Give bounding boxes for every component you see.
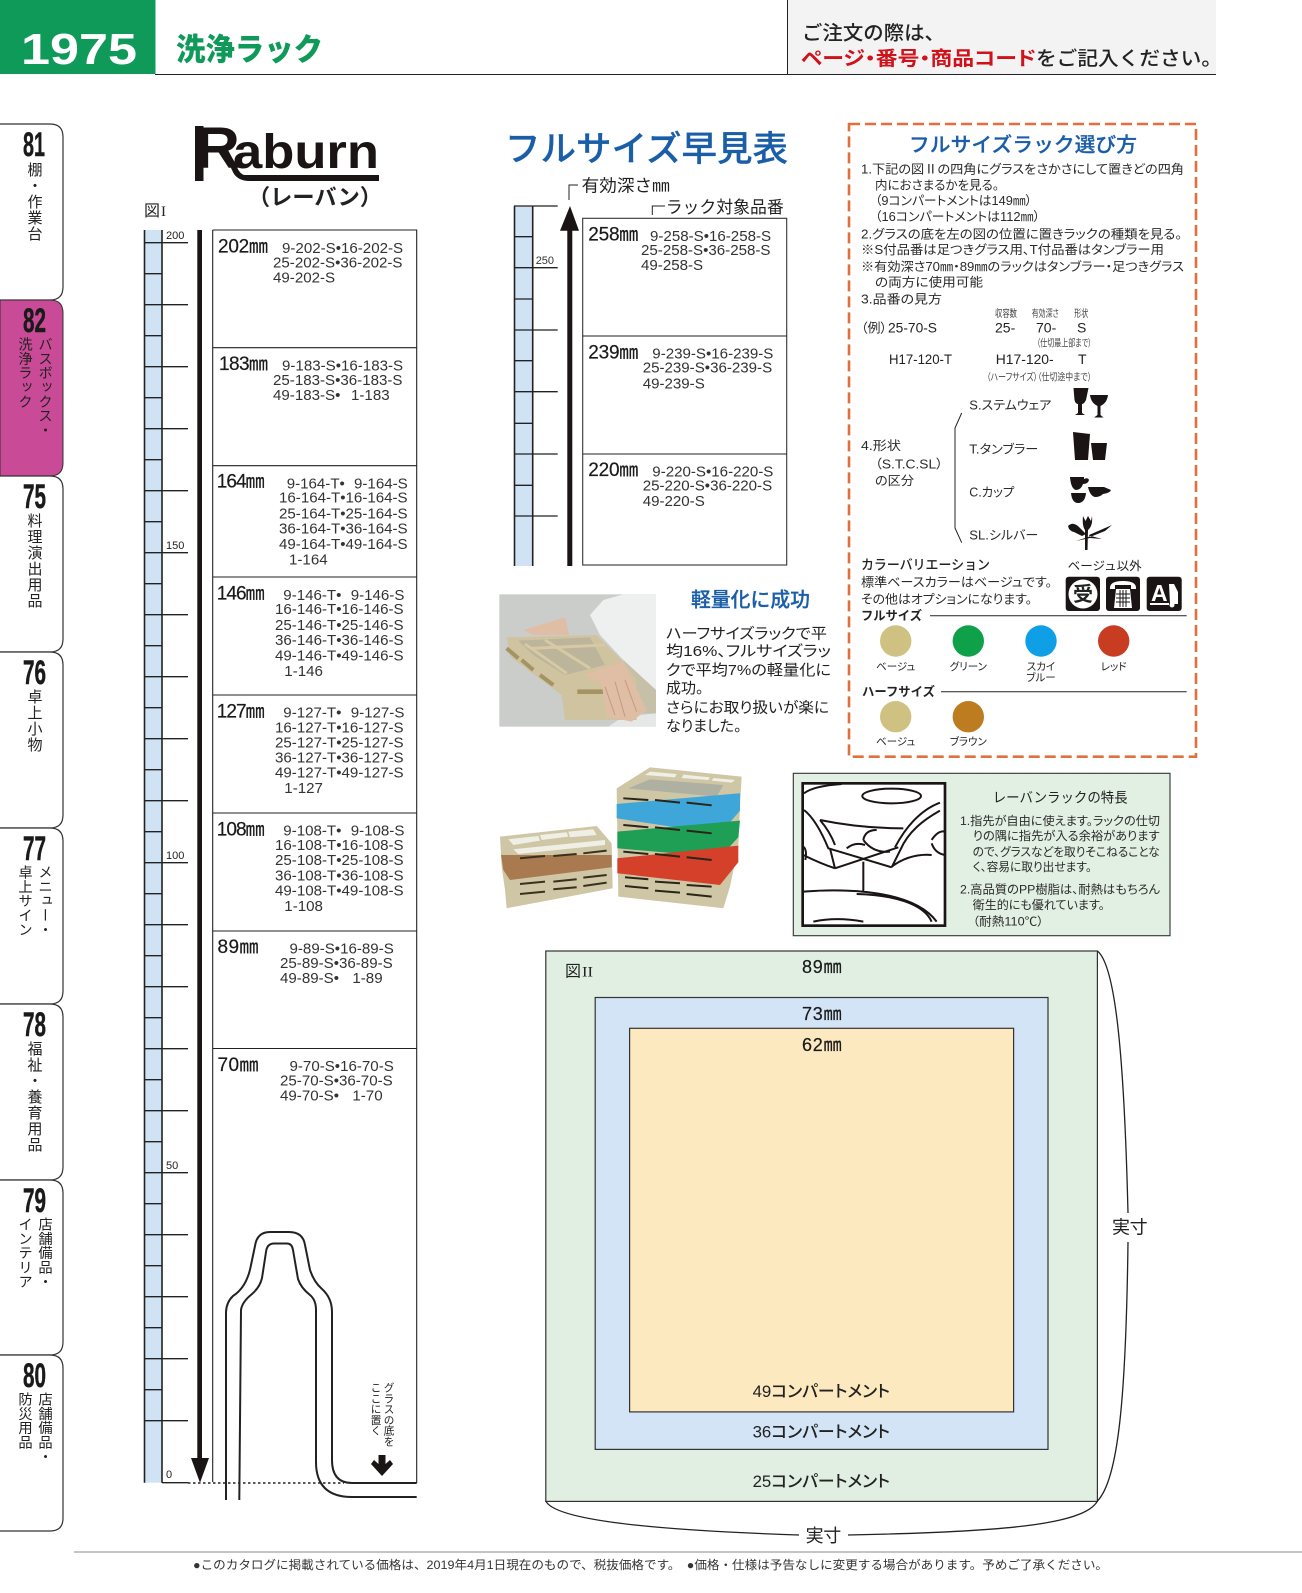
row 89: 9-89-S•16-89-S — [290, 941, 394, 958]
row 202: 49-202-S — [273, 270, 335, 286]
row 70: 70㎜ — [218, 1055, 258, 1076]
color variation — [861, 557, 1187, 748]
row 70: 1-70 — [352, 1088, 383, 1104]
row 258 — [588, 225, 771, 274]
swatch: green — [949, 625, 987, 673]
base dotted line — [188, 1482, 344, 1484]
part number key: 収容数 — [995, 307, 1017, 320]
part number key — [861, 307, 1092, 384]
row 89: 49-89-S• — [280, 970, 339, 987]
text: weight reduction: ハーフサイズラックで平 — [666, 625, 827, 642]
instructions: 1.下記の図Ⅱの四角にグラスをさかさにして置きどの四角 — [861, 162, 1184, 176]
figure 1 ruler: 0 — [166, 1469, 172, 1481]
side index tabs — [0, 124, 63, 1531]
row 164: 9-164-S — [354, 475, 408, 492]
half size colors — [862, 684, 1187, 748]
bracket: right — [1097, 951, 1148, 1501]
figure 2: actual size squares — [546, 951, 1148, 1546]
feature text: （耐熱110℃） — [973, 915, 1044, 929]
row 183: 25-183-S•36-183-S — [273, 372, 402, 389]
icon: cutlery — [1068, 516, 1112, 550]
row 108: 36-108-T•36-108-S — [275, 868, 404, 884]
header — [0, 0, 1222, 74]
row 202: 9-202-S•16-202-S — [282, 240, 403, 257]
row 108: 25-108-T•25-108-S — [275, 852, 404, 869]
row 70: 9-70-S•16-70-S — [290, 1058, 394, 1075]
row 146: 36-146-T•36-146-S — [275, 632, 404, 649]
depth header label: 有効深さ㎜ — [582, 177, 670, 196]
figure 1 ruler continuation — [514, 206, 558, 566]
part number key: （例） — [861, 321, 887, 336]
square: 49 compartments — [630, 1028, 1014, 1412]
figure 1 ruler continuation: 250 — [536, 255, 554, 267]
swatch: brown — [950, 701, 987, 748]
tab 77 — [0, 828, 63, 1004]
panel: how to choose — [849, 124, 1196, 757]
tab 75: 75 — [23, 478, 46, 516]
feature title: レーバンラックの特長 — [993, 790, 1128, 806]
row 146: 9-146-T• — [283, 587, 341, 604]
part number key: 70- — [1036, 320, 1057, 336]
part number key: 有効深さ — [1032, 307, 1059, 320]
swatch: brown: ブラウン — [950, 735, 987, 748]
row 108: 49-108-T•49-108-S — [275, 882, 404, 900]
color variation: カラーバリエーション — [861, 557, 990, 572]
square: 25 compartments: 図 — [565, 964, 581, 981]
feature text — [960, 814, 1161, 929]
tab 76 — [0, 652, 63, 828]
text: weight reduction: さらにお取り扱いが楽に — [666, 700, 829, 717]
panel: Raburn rack features — [793, 773, 1170, 936]
tab 76: 卓上小物 — [26, 689, 42, 753]
row 108: 9-108-S — [351, 822, 404, 840]
shape classification — [861, 388, 1112, 550]
feature text: りの隅に指先が入る余裕があります — [973, 829, 1160, 843]
instructions: 2.グラスの底を左の図の位置に置きラックの種類を見る。 — [861, 226, 1182, 241]
shape classification: S.ステムウェア — [969, 398, 1051, 412]
tab 75 — [0, 476, 63, 652]
row 220 — [588, 460, 773, 510]
color variation: その他はオプションになります。 — [861, 592, 1032, 606]
icon: stemware — [1074, 388, 1108, 418]
row 89: 89㎜ — [218, 937, 258, 958]
icon: delivery: A — [1151, 580, 1168, 606]
row 164: 1-164 — [289, 551, 328, 568]
row 239: 49-239-S — [643, 375, 705, 392]
stacked full size racks — [617, 767, 742, 908]
part number key: H17-120- — [996, 351, 1054, 367]
swatch: beige: ベージュ — [876, 736, 915, 748]
bracket: bottom — [546, 1501, 1097, 1546]
shape classification: 4.形状 — [861, 439, 901, 453]
tab 77: メニュー・ — [36, 865, 52, 936]
shape classification: C.カップ — [969, 486, 1015, 500]
bracket: bottom: 実寸 — [806, 1526, 841, 1546]
arrow: depth upward — [560, 206, 579, 566]
shape classification: （S.T.C.SL） — [875, 457, 943, 471]
row 108: 1-108 — [284, 898, 323, 915]
row 70 — [218, 1055, 394, 1104]
order note: ご注文の際は、 — [802, 22, 945, 44]
row 164: 25-164-T•25-164-S — [279, 505, 408, 522]
instructions: ※S付品番は足つきグラス用、T付品番はタンブラー用 — [861, 242, 1164, 257]
tab 82 active: バスボックス・ — [36, 337, 52, 437]
row 89: 25-89-S•36-89-S — [280, 955, 393, 972]
swatch: beige — [876, 625, 915, 673]
tab 80: 店舗備品・ — [36, 1392, 52, 1464]
row 220: 49-220-S — [643, 493, 705, 510]
illustration: finger space — [803, 783, 945, 926]
feature text: 1.指先が自由に使えます。ラックの仕切 — [960, 814, 1160, 828]
row 183: 183㎜ — [219, 354, 268, 375]
feature text: く、容易に取り出せます。 — [973, 860, 1092, 874]
text: weight reduction: なりました。 — [666, 718, 742, 735]
row 146: 1-146 — [284, 663, 323, 680]
brand logo: （レーバン） — [248, 185, 382, 210]
row 183: 1-183 — [351, 387, 390, 404]
square: 49 compartments: 62㎜ — [802, 1035, 842, 1055]
figure 1 ruler — [144, 230, 188, 1483]
feature text: ので、グラスなどを取りそこねることな — [973, 845, 1160, 859]
tab 78: 78 — [23, 1006, 46, 1044]
row 70: 49-70-S• — [280, 1088, 339, 1104]
row 183 — [219, 354, 403, 404]
row 202: 202㎜ — [218, 237, 268, 258]
row 202 — [218, 237, 403, 286]
row 108 — [217, 820, 404, 915]
swatch: sky blue: スカイ — [1027, 661, 1056, 673]
instructions: ※有効深さ70㎜・89㎜のラックはタンブラー・足つきグラス — [861, 259, 1184, 274]
part number key: H17-120-T — [889, 351, 952, 367]
rack code header label: ラック対象品番 — [666, 198, 784, 217]
photo: hands holding rack — [499, 594, 656, 727]
part number key: S — [1077, 320, 1086, 336]
part number key: 形状 — [1074, 307, 1088, 320]
row 127 — [217, 702, 404, 797]
order note — [801, 22, 1222, 70]
row 183: 49-183-S• — [273, 387, 340, 404]
text: weight reduction: 成功。 — [666, 680, 704, 697]
tab 80: 80 — [23, 1357, 46, 1395]
row 127: 36-127-T•36-127-S — [275, 750, 404, 766]
panel title: フルサイズラック選び方 — [909, 134, 1137, 157]
footer: ●このカタログに掲載されている価格は、2019年4月1日現在のもので、税抜価格です。 ●価格・仕様は予告なしに変更する場合があります。予めご了承ください。 — [193, 1557, 1108, 1572]
page number block — [0, 0, 156, 74]
row 127: 1-127 — [284, 780, 323, 797]
tab 80: 防災用品 — [16, 1392, 32, 1449]
row 146: 16-146-T•16-146-S — [275, 601, 404, 618]
instructions: （9コンパートメントは149㎜） — [875, 194, 1032, 208]
half size rack — [500, 826, 613, 908]
row 258: 9-258-S•16-258-S — [650, 228, 771, 245]
row 146: 25-146-T•25-146-S — [275, 617, 404, 634]
tab 77: 卓上サイン — [16, 865, 32, 936]
brand logo: R — [195, 116, 240, 181]
tab 75: 料理演出用品 — [26, 513, 42, 609]
row 108: 9-108-T• — [283, 822, 341, 840]
row 108: 16-108-T•16-108-S — [275, 837, 404, 854]
row 89 — [218, 937, 394, 987]
shape classification: SL.シルバー — [969, 528, 1038, 542]
shape classification: の区分 — [875, 474, 914, 488]
feature text: 衛生的にも優れています。 — [973, 898, 1105, 912]
order note: をご記入ください。 — [1036, 48, 1222, 70]
row 164 — [217, 471, 408, 568]
tab 79: 79 — [23, 1182, 46, 1220]
half size colors: ハーフサイズ — [862, 684, 935, 699]
row 164: 164㎜ — [217, 471, 265, 492]
shape classification: T.タンブラー — [969, 441, 1038, 456]
row 146: 146㎜ — [217, 583, 265, 604]
instructions: （16コンパートメントは112㎜） — [875, 210, 1040, 224]
color variation: ベージュ以外 — [1068, 559, 1142, 573]
order note: ページ・番号・商品コード — [801, 48, 1036, 70]
row 108: 108㎜ — [217, 820, 265, 840]
square: 49 compartments: 49コンパートメント — [753, 1382, 890, 1401]
part number key: 25-70-S — [888, 320, 937, 336]
full size colors — [861, 608, 1187, 684]
swatch: sky blue — [1025, 625, 1057, 684]
heading: full size chart: フルサイズ早見表 — [505, 130, 788, 169]
text: weight reduction — [666, 625, 831, 735]
figure 1 ruler: 150 — [166, 540, 184, 552]
glass silhouette — [226, 1232, 417, 1500]
row 164: 9-164-T• — [287, 475, 345, 492]
part number key: 25- — [995, 320, 1016, 336]
tab 82 active — [0, 300, 63, 476]
depth header label — [569, 177, 670, 200]
full size colors: フルサイズ — [861, 608, 922, 623]
heading: weight reduction: 軽量化に成功 — [691, 589, 810, 612]
icon: cup — [1070, 477, 1111, 503]
row 164: 49-164-T•49-164-S — [279, 536, 408, 553]
photo: stacked racks — [500, 767, 742, 908]
swatch: beige: ベージュ — [876, 661, 915, 673]
tab 82 active: 82 — [23, 302, 46, 340]
square: 25 compartments: II — [582, 965, 593, 981]
swatch: red: レッド — [1101, 661, 1127, 673]
color variation: 標準ベースカラーはベージュです。 — [861, 576, 1052, 590]
square: 25 compartments — [546, 951, 1097, 1501]
row 146 — [217, 583, 404, 680]
instructions: 3.品番の見方 — [861, 291, 942, 306]
swatch: sky blue: ブルー — [1026, 671, 1056, 684]
tab 82 active: 洗浄ラック — [16, 337, 32, 409]
part number key: T — [1078, 351, 1087, 367]
square: 25 compartments: 89㎜ — [802, 957, 842, 977]
tab 81: 81 — [23, 126, 45, 164]
figure 1 ruler: 200 — [166, 230, 184, 242]
figure 1 label: 図 — [144, 203, 160, 220]
square: 36 compartments — [595, 998, 1048, 1449]
header rule — [155, 0, 1216, 74]
row 164: 16-164-T•16-164-S — [279, 490, 408, 507]
icon: made to order: 受 — [1073, 583, 1093, 606]
note: put glass base here: ここに置く — [369, 1382, 381, 1436]
arrow: depth downward — [191, 230, 209, 1483]
tab 79: 店舗備品・ — [36, 1217, 52, 1288]
square: 25 compartments: 25コンパートメント — [753, 1472, 890, 1491]
figure 1 ruler: 50 — [166, 1160, 178, 1172]
instructions — [861, 162, 1184, 306]
row 164: 36-164-T•36-164-S — [279, 520, 408, 537]
part number key: （仕切最上部まで） — [1037, 337, 1092, 350]
tab 81 — [0, 124, 63, 300]
page title: 洗浄ラック — [176, 32, 323, 68]
tab 78: 福祉・養育用品 — [26, 1041, 42, 1153]
row 239: 9-239-S•16-239-S — [652, 346, 773, 363]
icon: phone order — [1106, 577, 1140, 611]
table: full size depth rows — [213, 230, 417, 1483]
note: put glass base here: グラスの底を — [382, 1382, 394, 1447]
tab 81: 棚・作業台 — [26, 162, 42, 242]
icon: made to order — [1066, 577, 1100, 611]
icon: tumbler — [1073, 432, 1107, 460]
row 239: 239㎜ — [588, 342, 638, 363]
figure 1 ruler: 100 — [166, 850, 184, 862]
icon: delivery — [1147, 577, 1182, 611]
row 258: 49-258-S — [641, 257, 703, 274]
tab 77: 77 — [23, 830, 46, 868]
row 239: 25-239-S•36-239-S — [643, 360, 772, 377]
row 89: 1-89 — [352, 970, 383, 987]
row 127: 127㎜ — [217, 702, 265, 723]
part number key: （ハーフサイズ）（仕切途中まで） — [987, 371, 1092, 384]
row 127: 9-127-S — [351, 705, 404, 722]
row 127: 49-127-T•49-127-S — [275, 765, 404, 782]
row 239 — [588, 342, 773, 392]
tab 76: 76 — [23, 654, 46, 692]
row 183: 9-183-S•16-183-S — [282, 358, 403, 375]
text: weight reduction: 均16%、フルサイズラッ — [666, 643, 831, 660]
instructions: の両方に使用可能 — [875, 275, 983, 290]
row 202: 25-202-S•36-202-S — [273, 254, 402, 272]
brand logo — [195, 116, 382, 210]
row 220: 220㎜ — [588, 460, 638, 481]
row 127: 16-127-T•16-127-S — [275, 719, 404, 736]
square: 36 compartments: 36コンパートメント — [753, 1422, 890, 1442]
square: 36 compartments: 73㎜ — [802, 1004, 842, 1024]
row 146: 49-146-T•49-146-S — [275, 648, 404, 665]
swatch: beige — [876, 701, 915, 748]
text: weight reduction: クで平均7%の軽量化に — [666, 662, 831, 679]
swatch: green: グリーン — [949, 660, 987, 673]
row 127: 9-127-T• — [283, 705, 341, 722]
row 258: 258㎜ — [588, 225, 638, 246]
feature text: 2.高品質のPP樹脂は、耐熱はもちろん — [960, 882, 1161, 896]
swatch: red — [1098, 625, 1129, 673]
note: put glass base here — [369, 1382, 394, 1476]
table: deep rows — [583, 218, 787, 565]
tab 80 — [0, 1355, 63, 1531]
order note background — [788, 0, 1216, 74]
figure 1 label: I — [161, 204, 166, 220]
row 127: 25-127-T•25-127-S — [275, 734, 404, 751]
page number block: 1975 — [21, 25, 137, 74]
instructions: 内におさまるかを見る。 — [875, 178, 999, 192]
row 70: 25-70-S•36-70-S — [280, 1072, 393, 1090]
row 146: 9-146-S — [351, 587, 404, 604]
bracket: right: 実寸 — [1112, 1218, 1148, 1238]
row 220: 25-220-S•36-220-S — [643, 478, 772, 495]
row 258: 25-258-S•36-258-S — [641, 242, 770, 259]
brand logo: aburn — [233, 126, 379, 179]
tab 79 — [0, 1180, 63, 1355]
row 220: 9-220-S•16-220-S — [652, 464, 773, 481]
tab 78 — [0, 1004, 63, 1180]
tab 79: インテリア — [16, 1217, 32, 1288]
